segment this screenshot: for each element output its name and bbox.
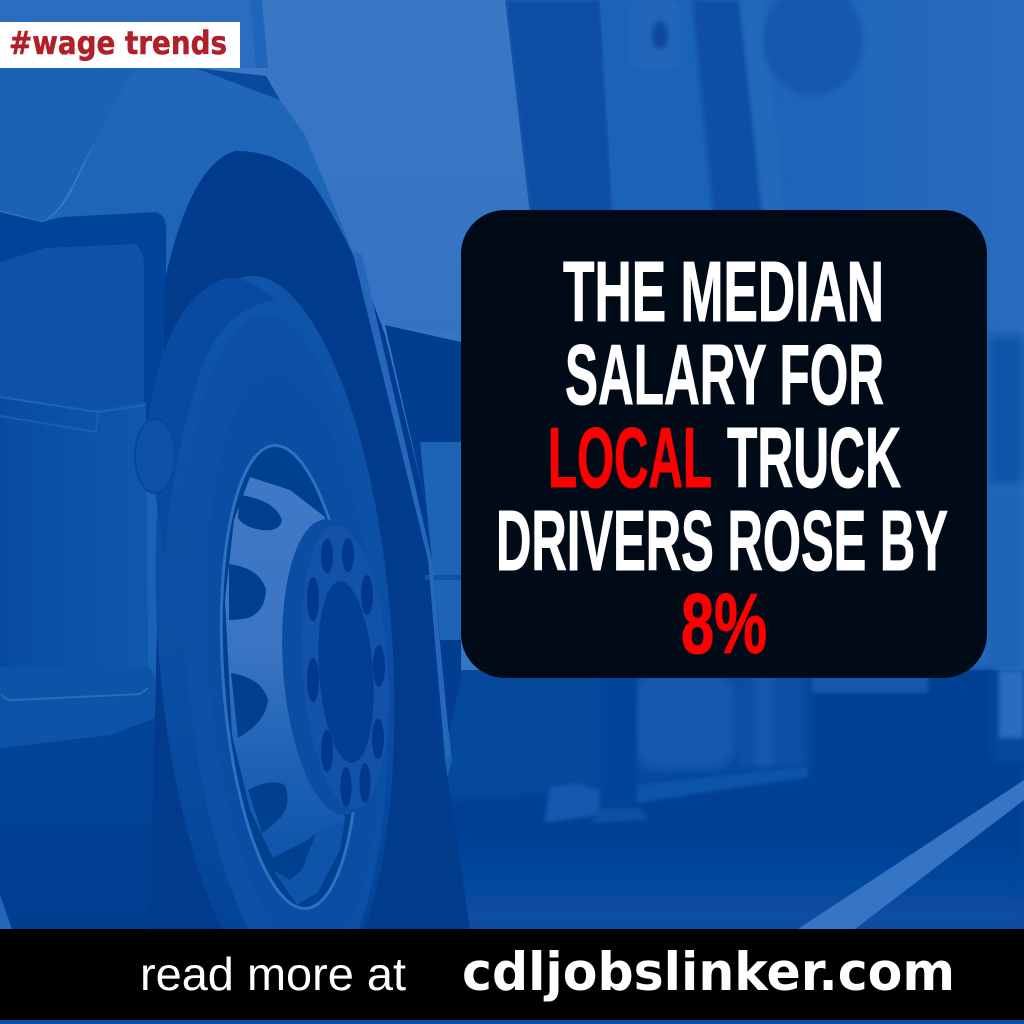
skirt band xyxy=(0,667,155,748)
cab upper panels xyxy=(0,0,256,68)
headline text: 8% xyxy=(681,577,767,672)
lower left shadow xyxy=(0,700,170,930)
sky trailer panel xyxy=(265,0,530,345)
wheel arch dark xyxy=(150,151,470,930)
lower side skirt xyxy=(0,396,148,667)
blurred trailer and road on right xyxy=(440,0,1024,930)
footer lead-in text: read more at xyxy=(140,948,406,1000)
headline text: TRUCK xyxy=(727,411,901,506)
fender bracket knob xyxy=(135,419,175,493)
footer bar xyxy=(0,929,1024,1024)
headline text: LOCAL xyxy=(548,411,712,506)
hub bolt holes xyxy=(307,538,385,807)
headline text xyxy=(496,245,948,672)
hashtag label: #wage trends xyxy=(9,24,227,62)
rim slots xyxy=(229,495,316,880)
dark cab block behind box xyxy=(0,212,166,420)
tyre xyxy=(133,268,417,1012)
step box left xyxy=(0,244,144,410)
wheel rim xyxy=(207,441,373,913)
callout panel xyxy=(461,210,987,678)
footer website: cdljobslinker.com xyxy=(462,942,955,1003)
wheel hub xyxy=(273,516,398,818)
